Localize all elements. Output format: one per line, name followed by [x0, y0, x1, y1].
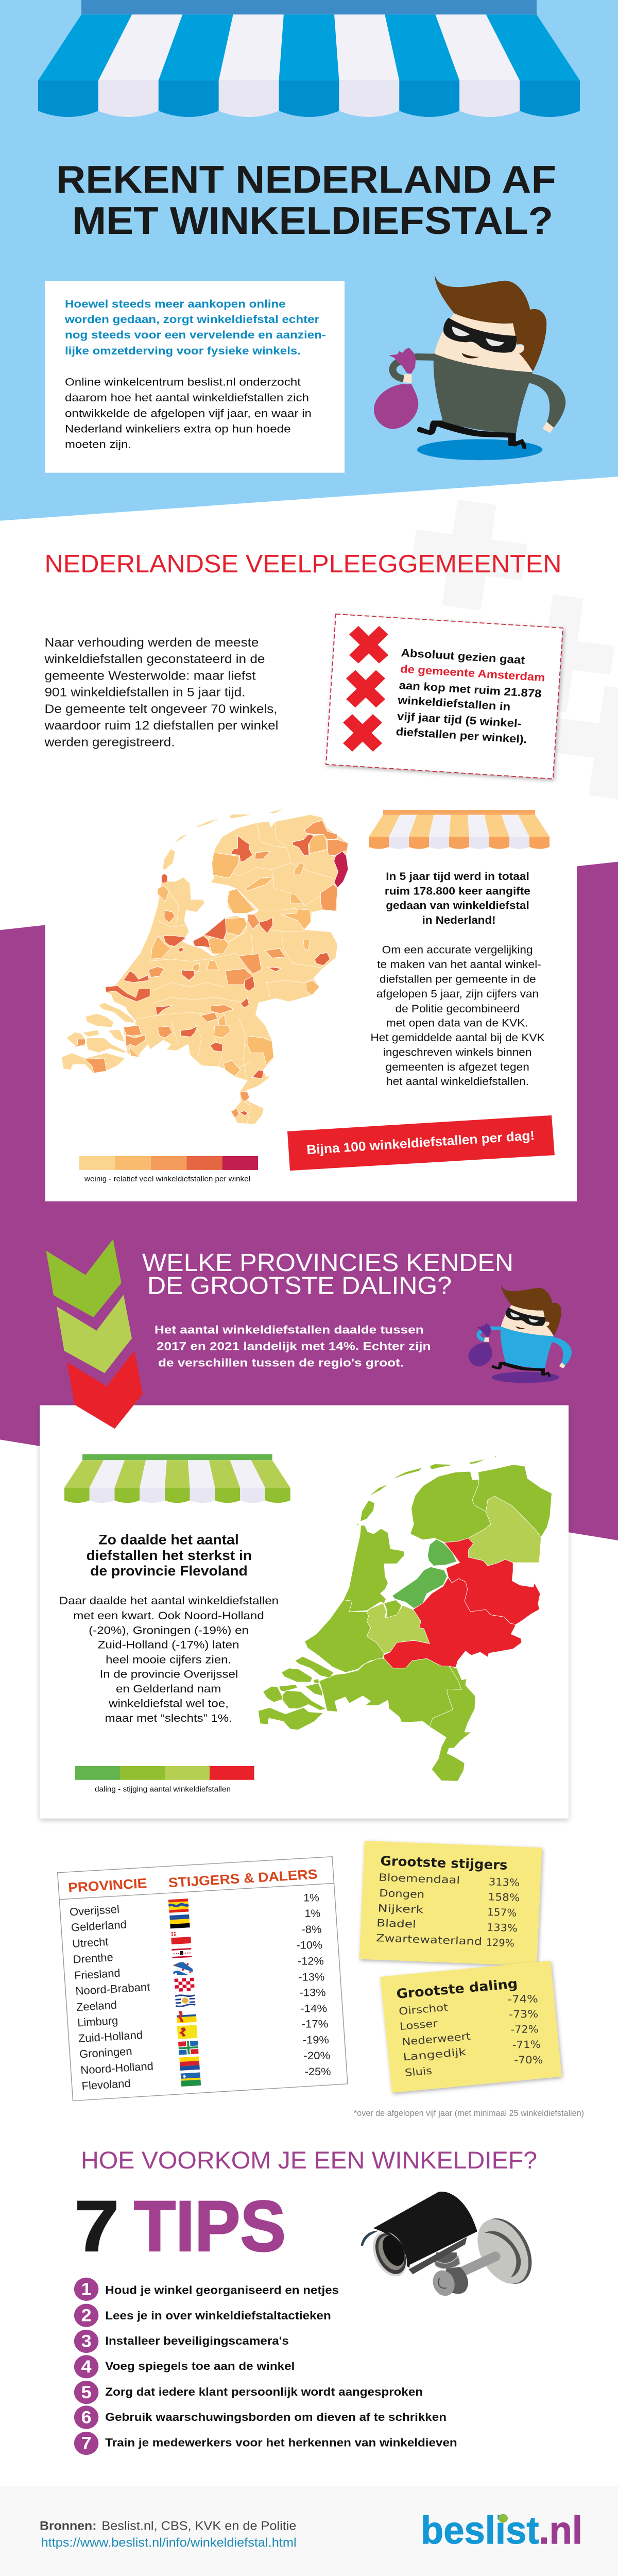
- tip 2: 2: [81, 2306, 92, 2325]
- table percentages: -10%: [297, 1939, 322, 1951]
- table province names: Friesland: [74, 1967, 121, 1982]
- icon: flag Noord-Brabant: [174, 1978, 195, 1992]
- intro body text: ontwikkelde de afgelopen vijf jaar, en waar in: [65, 407, 312, 419]
- note names: -72%: [510, 2023, 539, 2036]
- text block: method: het aantal winkeldiefstallen.: [386, 1075, 529, 1088]
- heading: provinces: [142, 1249, 513, 1299]
- table province names: Noord-Holland: [80, 2060, 154, 2077]
- table province names: Zuid-Holland: [78, 2028, 143, 2045]
- table percentages: -13%: [300, 1986, 326, 1998]
- note names: [398, 1993, 543, 2079]
- panel: white map panel: [45, 857, 577, 1201]
- tip 2: Lees je in over winkeldiefstaltactieken: [105, 2309, 331, 2322]
- table percentages: -8%: [302, 1923, 322, 1936]
- text block: Westerwolde: [44, 636, 278, 749]
- note names: -71%: [512, 2038, 541, 2050]
- callout text: [396, 647, 545, 745]
- icon: flag Friesland: [173, 1962, 193, 1976]
- table province names: [69, 1903, 154, 2092]
- intro body text: Online winkelcentrum beslist.nl onderzocht: [65, 376, 301, 388]
- text block: method: ingeschreven winkels binnen: [383, 1046, 531, 1058]
- callout: red banner: [287, 1115, 555, 1171]
- tip 3: Installeer beveiligingscamera's: [105, 2334, 289, 2347]
- heading: Flevoland: Zo daalde het aantal: [98, 1532, 239, 1547]
- icon: security camera: [361, 2192, 542, 2298]
- heading: prevention: HOE VOORKOM JE EEN WINKELDIEF?: [81, 2147, 537, 2174]
- sources: Beslist.nl, CBS, KVK en de Politie: [101, 2519, 296, 2533]
- intro body text: moeten zijn.: [65, 438, 131, 451]
- legend: relative thefts per shop: weinig - relatief veel winkeldiefstallen per winkel: [84, 1175, 250, 1183]
- callout text: Absoluut gezien gaat: [401, 647, 526, 666]
- note names: 133%: [487, 1921, 518, 1934]
- heading: 7 tips: TIPS: [134, 2187, 286, 2266]
- text block: total reports: [385, 870, 530, 926]
- tip 6: Gebruik waarschuwingsborden om dieven af te schrikken: [105, 2411, 447, 2424]
- intro body text: daarom hoe het aantal winkeldiefstallen zich: [65, 392, 309, 404]
- note names: Zwartewaterland: [376, 1932, 483, 1947]
- text block: national decline: 2017 en 2021 landelijk met 14%. Echter zijn: [157, 1340, 431, 1352]
- table province names: Groningen: [79, 2045, 132, 2060]
- text block: national decline: de verschillen tussen de regio's groot.: [158, 1356, 404, 1369]
- note names: -74%: [508, 1993, 538, 2005]
- table percentages: -14%: [300, 2002, 327, 2014]
- intro highlight text: Hoewel steeds meer aankopen online: [65, 298, 286, 310]
- background: purple band: [0, 862, 618, 1540]
- text block: Westerwolde: gemeente Westerwolde: maar liefst: [44, 669, 255, 683]
- callout text: aan kop met ruim 21.878: [399, 679, 542, 700]
- chart: municipality map of the Netherlands: [61, 808, 348, 1124]
- title: [56, 158, 556, 243]
- icon: flag Utrecht: [171, 1930, 191, 1944]
- awning: orange: [369, 810, 550, 849]
- table percentages: -17%: [302, 2018, 329, 2030]
- text block: national decline: Het aantal winkeldiefstallen daalde tussen: [154, 1323, 424, 1336]
- footnote: *over de afgelopen vijf jaar (met minimaal 25 winkeldiefstallen): [354, 2108, 584, 2118]
- tip 2: [74, 2304, 331, 2327]
- note names: Nederweert: [401, 2030, 471, 2048]
- tip 6: 6: [81, 2408, 92, 2427]
- note heading: Grootste daling: [396, 1976, 518, 2002]
- note names: -73%: [509, 2008, 538, 2020]
- table percentages: -25%: [305, 2065, 331, 2078]
- awning: blue shop awning: [38, 0, 580, 117]
- text block: method: met open data van de KVK.: [386, 1016, 528, 1029]
- icon: flag Groningen: [178, 2041, 199, 2055]
- tip 3: [74, 2330, 289, 2353]
- note names: 157%: [487, 1906, 517, 1919]
- legend: relative thefts per shop: [79, 1156, 258, 1183]
- text block: provinces detail: Zuid-Holland (-17%) laten: [98, 1638, 239, 1651]
- tip 5: 5: [81, 2383, 92, 2402]
- text block: method: Het gemiddelde aantal bij de KVK: [370, 1031, 545, 1044]
- table header: [67, 1866, 318, 1895]
- note heading: Grootste stijgers: [380, 1854, 508, 1873]
- text block: Westerwolde: Naar verhouding werden de meeste: [44, 636, 259, 650]
- sources: [40, 2519, 297, 2550]
- icon: small thief: [468, 1284, 572, 1383]
- note names: -70%: [514, 2054, 543, 2066]
- table percentages: -12%: [298, 1955, 324, 1967]
- note names: [376, 1871, 520, 1949]
- awning: green: [64, 1454, 290, 1503]
- chart: province map: [258, 1455, 552, 1781]
- table header: PROVINCIE: [67, 1875, 147, 1895]
- icon: flag Drenthe: [171, 1946, 192, 1960]
- text block: method: gemeenten is afgezet tegen: [385, 1060, 529, 1073]
- text block: Westerwolde: 901 winkeldiefstallen in 5 jaar tijd.: [44, 685, 246, 699]
- tip 5: [74, 2381, 423, 2404]
- note names: Nijkerk: [377, 1902, 424, 1916]
- text block: provinces detail: [59, 1595, 279, 1724]
- text block: method: [370, 943, 545, 1088]
- text block: total reports: gedaan van winkeldiefstal: [386, 899, 529, 912]
- text block: national decline: [154, 1323, 431, 1369]
- heading: Flevoland: de provincie Flevoland: [90, 1563, 248, 1579]
- text block: method: Om een accurate vergelijking: [382, 943, 533, 956]
- icon: flag Limburg: [176, 2009, 197, 2023]
- title: MET WINKELDIEFSTAL?: [72, 199, 553, 243]
- text block: total reports: In 5 jaar tijd werd in totaal: [386, 870, 529, 883]
- table header: STIJGERS & DALERS: [168, 1866, 318, 1890]
- map highlight: Westerwolde: [334, 852, 348, 888]
- text block: method: diefstallen per gemeente in de: [380, 973, 536, 986]
- table percentages: 1%: [303, 1891, 319, 1904]
- table percentages: -19%: [303, 2033, 329, 2046]
- table percentages: 1%: [305, 1907, 320, 1920]
- table province names: Flevoland: [81, 2077, 131, 2092]
- background: faint Amsterdam crosses: [406, 495, 618, 805]
- heading: provinces: DE GROOTSTE DALING?: [147, 1272, 452, 1299]
- text block: method: te maken van het aantal winkel-: [377, 958, 541, 971]
- table percentages: -13%: [298, 1971, 324, 1983]
- tip 5: Zorg dat iedere klant persoonlijk wordt aangesproken: [105, 2385, 423, 2398]
- panel: province panel: [40, 1405, 569, 1819]
- heading: provinces: WELKE PROVINCIES KENDEN: [142, 1249, 513, 1277]
- text block: method: afgelopen 5 jaar, zijn cijfers van: [376, 988, 539, 1000]
- text block: provinces detail: Daar daalde het aantal winkeldiefstallen: [59, 1595, 279, 1607]
- tip 7: Train je medewerkers voor het herkennen van winkeldieven: [105, 2436, 457, 2449]
- tip 1: Houd je winkel georganiseerd en netjes: [105, 2283, 339, 2296]
- text block: provinces detail: (-20%), Groningen (-19%) en: [89, 1624, 249, 1636]
- table province names: Drenthe: [73, 1951, 113, 1965]
- icon: flag Zeeland: [175, 1993, 195, 2008]
- sources: https://www.beslist.nl/info/winkeldiefstal.html: [41, 2536, 297, 2550]
- text block: provinces detail: en Gelderland nam: [116, 1683, 221, 1695]
- panel: intro text: [45, 281, 345, 473]
- table province names: Gelderland: [71, 1918, 127, 1934]
- note names: Sluis: [404, 2064, 433, 2079]
- note names: Bladel: [376, 1917, 416, 1930]
- intro body text: [65, 376, 312, 451]
- intro highlight text: nog steeds voor een vervelende en aanzien-: [65, 329, 326, 341]
- table percentages: -20%: [303, 2049, 330, 2062]
- callout text: diefstallen per winkel).: [396, 725, 527, 745]
- title: REKENT NEDERLAND AF: [56, 158, 556, 201]
- list: seven tips: [74, 2278, 457, 2455]
- table province names: Utrecht: [72, 1935, 109, 1950]
- note names: 129%: [486, 1936, 514, 1949]
- background: sky blue header band: [0, 0, 618, 521]
- icon: flag Gelderland: [169, 1914, 190, 1928]
- sticky note: grootste daling: [380, 1961, 562, 2093]
- note names: 313%: [489, 1876, 520, 1889]
- note names: Bloemendaal: [379, 1871, 460, 1886]
- legend: decline to increase: [75, 1766, 254, 1793]
- tip 4: Voeg spiegels toe aan de winkel: [105, 2360, 295, 2372]
- text block: Westerwolde: winkeldiefstallen geconstateerd in de: [44, 652, 265, 666]
- tip 3: 3: [81, 2332, 92, 2351]
- tip 7: 7: [81, 2434, 92, 2453]
- logo: beslist.nl: beslist.nl: [421, 2509, 582, 2552]
- tip 4: [74, 2355, 295, 2378]
- icon: flag Flevoland: [181, 2072, 201, 2087]
- callout text: winkeldiefstallen in: [397, 693, 511, 713]
- icon: three descending chevrons: [46, 1239, 143, 1429]
- text block: Westerwolde: De gemeente telt ongeveer 70 winkels,: [44, 702, 278, 716]
- heading: Flevoland: diefstallen het sterkst in: [87, 1548, 252, 1563]
- intro highlight text: [64, 298, 326, 357]
- text block: method: de Politie gecombineerd: [396, 1003, 520, 1015]
- text block: provinces detail: maar met “slechts” 1%.: [105, 1712, 232, 1724]
- intro highlight text: lijke omzetderving voor fysieke winkels.: [65, 345, 301, 357]
- tip 6: [74, 2405, 447, 2429]
- heading: 7 tips: 7: [75, 2187, 119, 2266]
- text block: provinces detail: heel mooie cijfers zien.: [106, 1653, 231, 1666]
- heading: 7 tips: [75, 2187, 286, 2266]
- table province names: Overijssel: [69, 1903, 120, 1918]
- note names: Oirschot: [398, 2001, 449, 2018]
- icon: flag Noord-Holland: [179, 2057, 200, 2071]
- note names: Losser: [399, 2017, 439, 2032]
- icon: three Amsterdam crosses: [348, 630, 384, 748]
- text block: total reports: ruim 178.800 keer aangifte: [385, 885, 530, 897]
- table province names: Zeeland: [76, 1998, 117, 2013]
- intro body text: Nederland winkeliers extra op hun hoede: [65, 422, 291, 435]
- intro highlight text: worden gedaan, zorgt winkeldiefstal echter: [64, 313, 319, 326]
- text block: Westerwolde: waardoor ruim 12 diefstallen per winkel: [44, 719, 278, 733]
- note names: 158%: [488, 1891, 520, 1904]
- callout: red banner: Bijna 100 winkeldiefstallen per dag!: [306, 1128, 535, 1157]
- legend: decline to increase: daling - stijging aantal winkeldiefstallen: [95, 1785, 231, 1793]
- tip 4: 4: [81, 2357, 92, 2377]
- callout text: vijf jaar tijd (5 winkel-: [397, 710, 522, 730]
- table province names: Limburg: [77, 2014, 118, 2029]
- note names: Langedijk: [402, 2046, 467, 2063]
- tip 1: [74, 2278, 339, 2301]
- text block: provinces detail: winkeldiefstal wel toe,: [108, 1697, 229, 1710]
- text block: provinces detail: met een kwart. Ook Noord-Holland: [73, 1609, 264, 1622]
- footer band: [0, 2486, 618, 2576]
- heading: veelpleeggemeenten: NEDERLANDSE VEELPLEEGGEMEENTEN: [44, 549, 561, 578]
- note names: Dongen: [379, 1887, 425, 1901]
- table: province risers and fallers: [58, 1857, 348, 2101]
- callout text: de gemeente Amsterdam: [400, 663, 545, 684]
- text block: Westerwolde: werden geregistreerd.: [44, 735, 175, 749]
- heading: Flevoland: [87, 1532, 252, 1579]
- sources: Bronnen:: [40, 2519, 96, 2533]
- table province names: Noord-Brabant: [75, 1980, 151, 1997]
- tip 7: [74, 2432, 457, 2455]
- icon: flag Zuid-Holland: [177, 2025, 197, 2039]
- text block: total reports: in Nederland!: [422, 913, 496, 926]
- tip 1: 1: [81, 2280, 92, 2299]
- text block: provinces detail: In de provincie Overijssel: [100, 1668, 238, 1681]
- icon: flag Overijssel: [168, 1899, 188, 1913]
- callout: Amsterdam: [326, 614, 563, 779]
- table percentages: [297, 1891, 331, 2078]
- icon: thief with bag: [374, 274, 565, 460]
- sticky note: grootste stijgers: [359, 1841, 542, 1966]
